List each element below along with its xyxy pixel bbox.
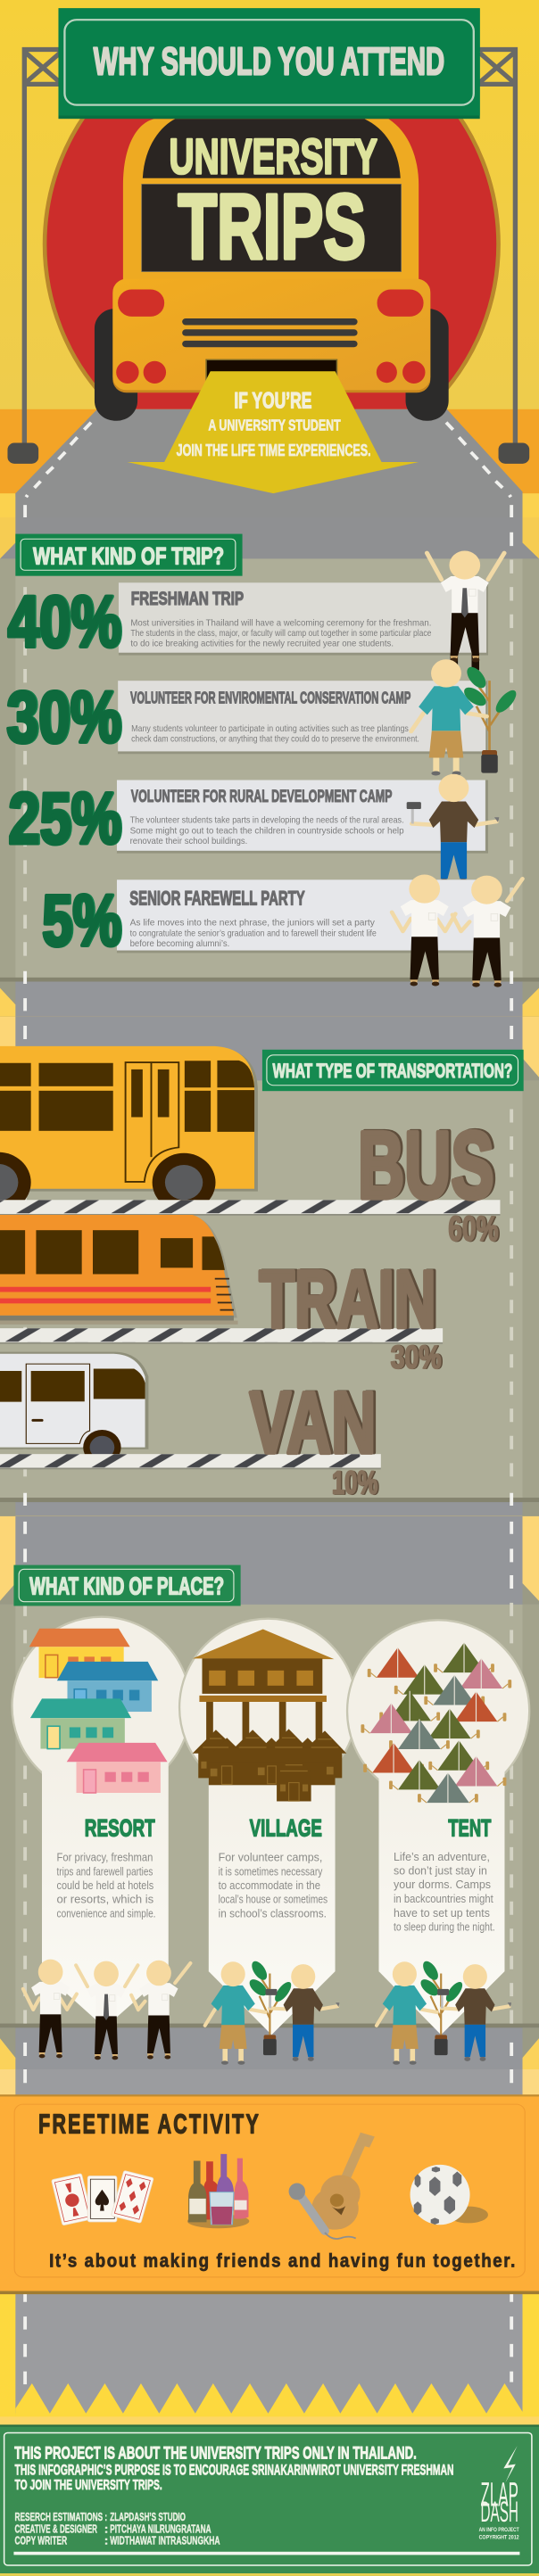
card: freshman trip: Most universities in Thailand will have a welcoming ceremony for the freshman.: [130, 618, 431, 628]
value: 10%: [332, 1466, 379, 1501]
text: resort description: or resorts, which is: [57, 1893, 153, 1906]
figures: resort students: [23, 1960, 190, 2060]
icon: guitar and microphone: [289, 2133, 375, 2239]
value: 30%: 30%: [392, 1340, 443, 1376]
text: credits: WIDTHAWAT INTRASUNGKHA: [110, 2534, 220, 2547]
figures: village volunteers with plant: [205, 1959, 339, 2065]
label: van: VAN: [250, 1374, 376, 1472]
value: 10%: 10%: [333, 1466, 379, 1501]
card: senior farewell party: [117, 879, 479, 953]
text: village description: to accommodate in the: [219, 1878, 320, 1892]
bus windows: [143, 119, 401, 178]
stat: 25%: 25%: [10, 778, 122, 859]
text: project statement: TO JOIN THE UNIVERSITY TRIPS.: [15, 2477, 162, 2493]
text: credits: [15, 2510, 220, 2547]
road bar: van 10 percent: [0, 1454, 381, 1469]
figure: senior student left: [392, 875, 455, 987]
illustration: yellow bus: [0, 1046, 258, 1213]
bus wheels: [95, 309, 449, 421]
icon: bottles and glass: [187, 2154, 249, 2228]
text: tent description: to sleep during the night.: [394, 1920, 495, 1934]
card: rural camp: Some might go out to teach the children in countryside schools or help: [130, 826, 404, 836]
icon: tents: [361, 1643, 511, 1803]
card: environmental camp: [118, 681, 487, 754]
road gantry: [7, 50, 529, 464]
yellow arrow callout: JOIN THE LIFE TIME EXPERIENCES.: [177, 441, 371, 459]
card: freshman trip: to do ice breaking activities for the newly recruited year one students.: [130, 639, 394, 648]
bus lights and grille: [116, 289, 425, 384]
sign: what kind of place: WHAT KIND OF PLACE?: [29, 1572, 224, 1599]
stat: 40%: 40%: [7, 581, 121, 662]
text: project statement: [14, 2444, 453, 2493]
figure: freshman with tie: [427, 550, 504, 670]
value: 30%: 30%: [391, 1340, 442, 1375]
label: train: TRAIN: [261, 1254, 438, 1344]
label: village: VILLAGE: [250, 1814, 322, 1842]
card: freshman trip: The students in the class, major, or faculty will camp out together in some particular place: [130, 628, 431, 639]
label: van: [250, 1374, 378, 1472]
icon: soccer ball: [410, 2165, 488, 2225]
card: senior farewell party: SENIOR FAREWELL PARTY: [129, 887, 305, 909]
label: van: VAN: [252, 1374, 378, 1471]
text: village description: in school’s classrooms.: [219, 1906, 327, 1920]
card: senior farewell party: As life moves into the next phrase, the juniors will set a party: [130, 918, 375, 929]
sign: what kind of place: [13, 1565, 241, 1606]
figure: volunteer in teal shirt: [411, 659, 486, 776]
road: [15, 409, 523, 517]
text: resort description: trips and farewell parties: [57, 1864, 153, 1878]
sign: what kind of trip: WHAT KIND OF TRIP?: [33, 541, 224, 569]
card: environmental camp: Many students volunteer to participate in outing activities such as tree plantings,: [131, 723, 410, 734]
text: village description: it is sometimes necessary: [219, 1864, 323, 1878]
icon: playing cards: [52, 2170, 153, 2225]
school bus rear: [112, 119, 430, 392]
stat: 5%: 5%: [42, 879, 121, 961]
card: freshman trip: FRESHMAN TRIP: [131, 588, 244, 609]
text: credits: RESERCH ESTIMATIONS :: [15, 2510, 107, 2523]
section: what kind of place: [0, 1516, 539, 2069]
text: credits: :: [104, 2534, 108, 2547]
title line: Trips: TRIPS: [178, 176, 366, 278]
text: resort description: could be held at hotels: [57, 1878, 153, 1892]
value: 60%: 60%: [450, 1210, 500, 1249]
figures: tent volunteers with plant: [377, 1959, 511, 2065]
card: senior farewell party: before becoming alumni’s.: [130, 938, 229, 949]
label: train: TRAIN: [259, 1254, 435, 1344]
sign: what kind of trip: [15, 534, 243, 576]
heading: freetime activity: FREETIME ACTIVITY: [38, 2109, 261, 2139]
icon: resort houses: [29, 1629, 168, 1793]
text: resort description: convenience and simple.: [57, 1906, 155, 1920]
text: tent description: your dorms. Camps: [394, 1878, 491, 1891]
section: what type of transportation: [0, 1017, 539, 1516]
road bar: train 30 percent: [0, 1328, 443, 1344]
value: 60%: 60%: [448, 1210, 499, 1248]
text: village description: For volunteer camps,: [219, 1851, 322, 1864]
label: tent: TENT: [448, 1814, 491, 1842]
text: tent description: in backcountries might: [394, 1892, 493, 1905]
title line: University: UNIVERSITY: [170, 130, 377, 185]
footer panel: [0, 2424, 539, 2576]
yellow arrow callout: IF YOU’RE: [234, 389, 311, 414]
logo: zlap dash: COPYRIGHT 2012: [479, 2535, 519, 2541]
hero: bus, sun and road: [0, 0, 539, 517]
yellow arrow callout: [128, 371, 419, 493]
text: tent description: Life’s an adventure,: [394, 1850, 490, 1863]
logo: zlap dash: AN INFO PROJECT: [479, 2527, 519, 2533]
section: what kind of trip: [0, 517, 539, 1017]
text: credits: ZLAPDASH’S STUDIO: [110, 2510, 186, 2523]
stat: 5%: 5%: [44, 879, 122, 961]
value: 10%: 10%: [332, 1466, 377, 1501]
text: resort description: [57, 1851, 155, 1920]
section: freetime activity and footer: [0, 2069, 539, 2576]
sign: what type of transportation: [262, 1050, 524, 1091]
label: resort: RESORT: [85, 1814, 155, 1842]
illustration: orange train: [0, 1215, 238, 1325]
panel: freetime activity: [0, 2094, 539, 2294]
icon: tree sapling: [460, 664, 519, 773]
text: tent description: have to set up tents: [394, 1906, 490, 1920]
panel: resort: [12, 1617, 191, 2027]
value: 60%: [448, 1210, 500, 1249]
text: village description: [219, 1851, 328, 1920]
icon: village houses: [193, 1630, 346, 1801]
text: credits: :: [104, 2522, 108, 2535]
text: resort description: For privacy, freshman: [57, 1851, 153, 1864]
stat: 25%: 25%: [8, 778, 121, 859]
stat: 40%: 40%: [9, 581, 122, 662]
card: freshman trip: [119, 582, 488, 656]
text: credits: COPY WRITER: [15, 2534, 67, 2547]
text: tent description: so don’t just stay in: [394, 1864, 487, 1878]
card: rural camp: The volunteer students take parts in developing the needs of the rural areas.: [130, 815, 404, 826]
stat: 30%: 30%: [6, 676, 121, 757]
figure: volunteer with hammer: [407, 774, 499, 884]
panel: tent: [347, 1620, 529, 2035]
panel: village: [179, 1619, 357, 2035]
red sun: [45, 17, 499, 471]
heading sign: why should you attend: [58, 8, 480, 119]
yellow arrow callout: A UNIVERSITY STUDENT: [208, 417, 341, 433]
card: rural camp: [117, 780, 488, 854]
text: credits: CREATIVE & DESIGNER: [15, 2522, 97, 2535]
logo: zlap dash: [479, 2446, 519, 2541]
illustration: white van: [0, 1352, 148, 1465]
label: train: [259, 1254, 438, 1344]
road bar: bus 60 percent: [0, 1200, 500, 1216]
card: rural camp: renovate their school buildings.: [130, 836, 247, 846]
card: environmental camp: check dam constructions, or anything that they could do to preserve the environment.: [131, 734, 419, 744]
card: senior farewell party: to congratulate the senior’s graduation and to farewell their student life: [130, 929, 377, 938]
figure: senior student right: [452, 876, 523, 987]
stat: 30%: 30%: [8, 676, 122, 757]
text: village description: local’s house or sometimes: [219, 1893, 328, 1906]
text: tent description: [394, 1850, 495, 1934]
text: credits: PITCHAYA NILRUNGRATANA: [110, 2522, 211, 2535]
